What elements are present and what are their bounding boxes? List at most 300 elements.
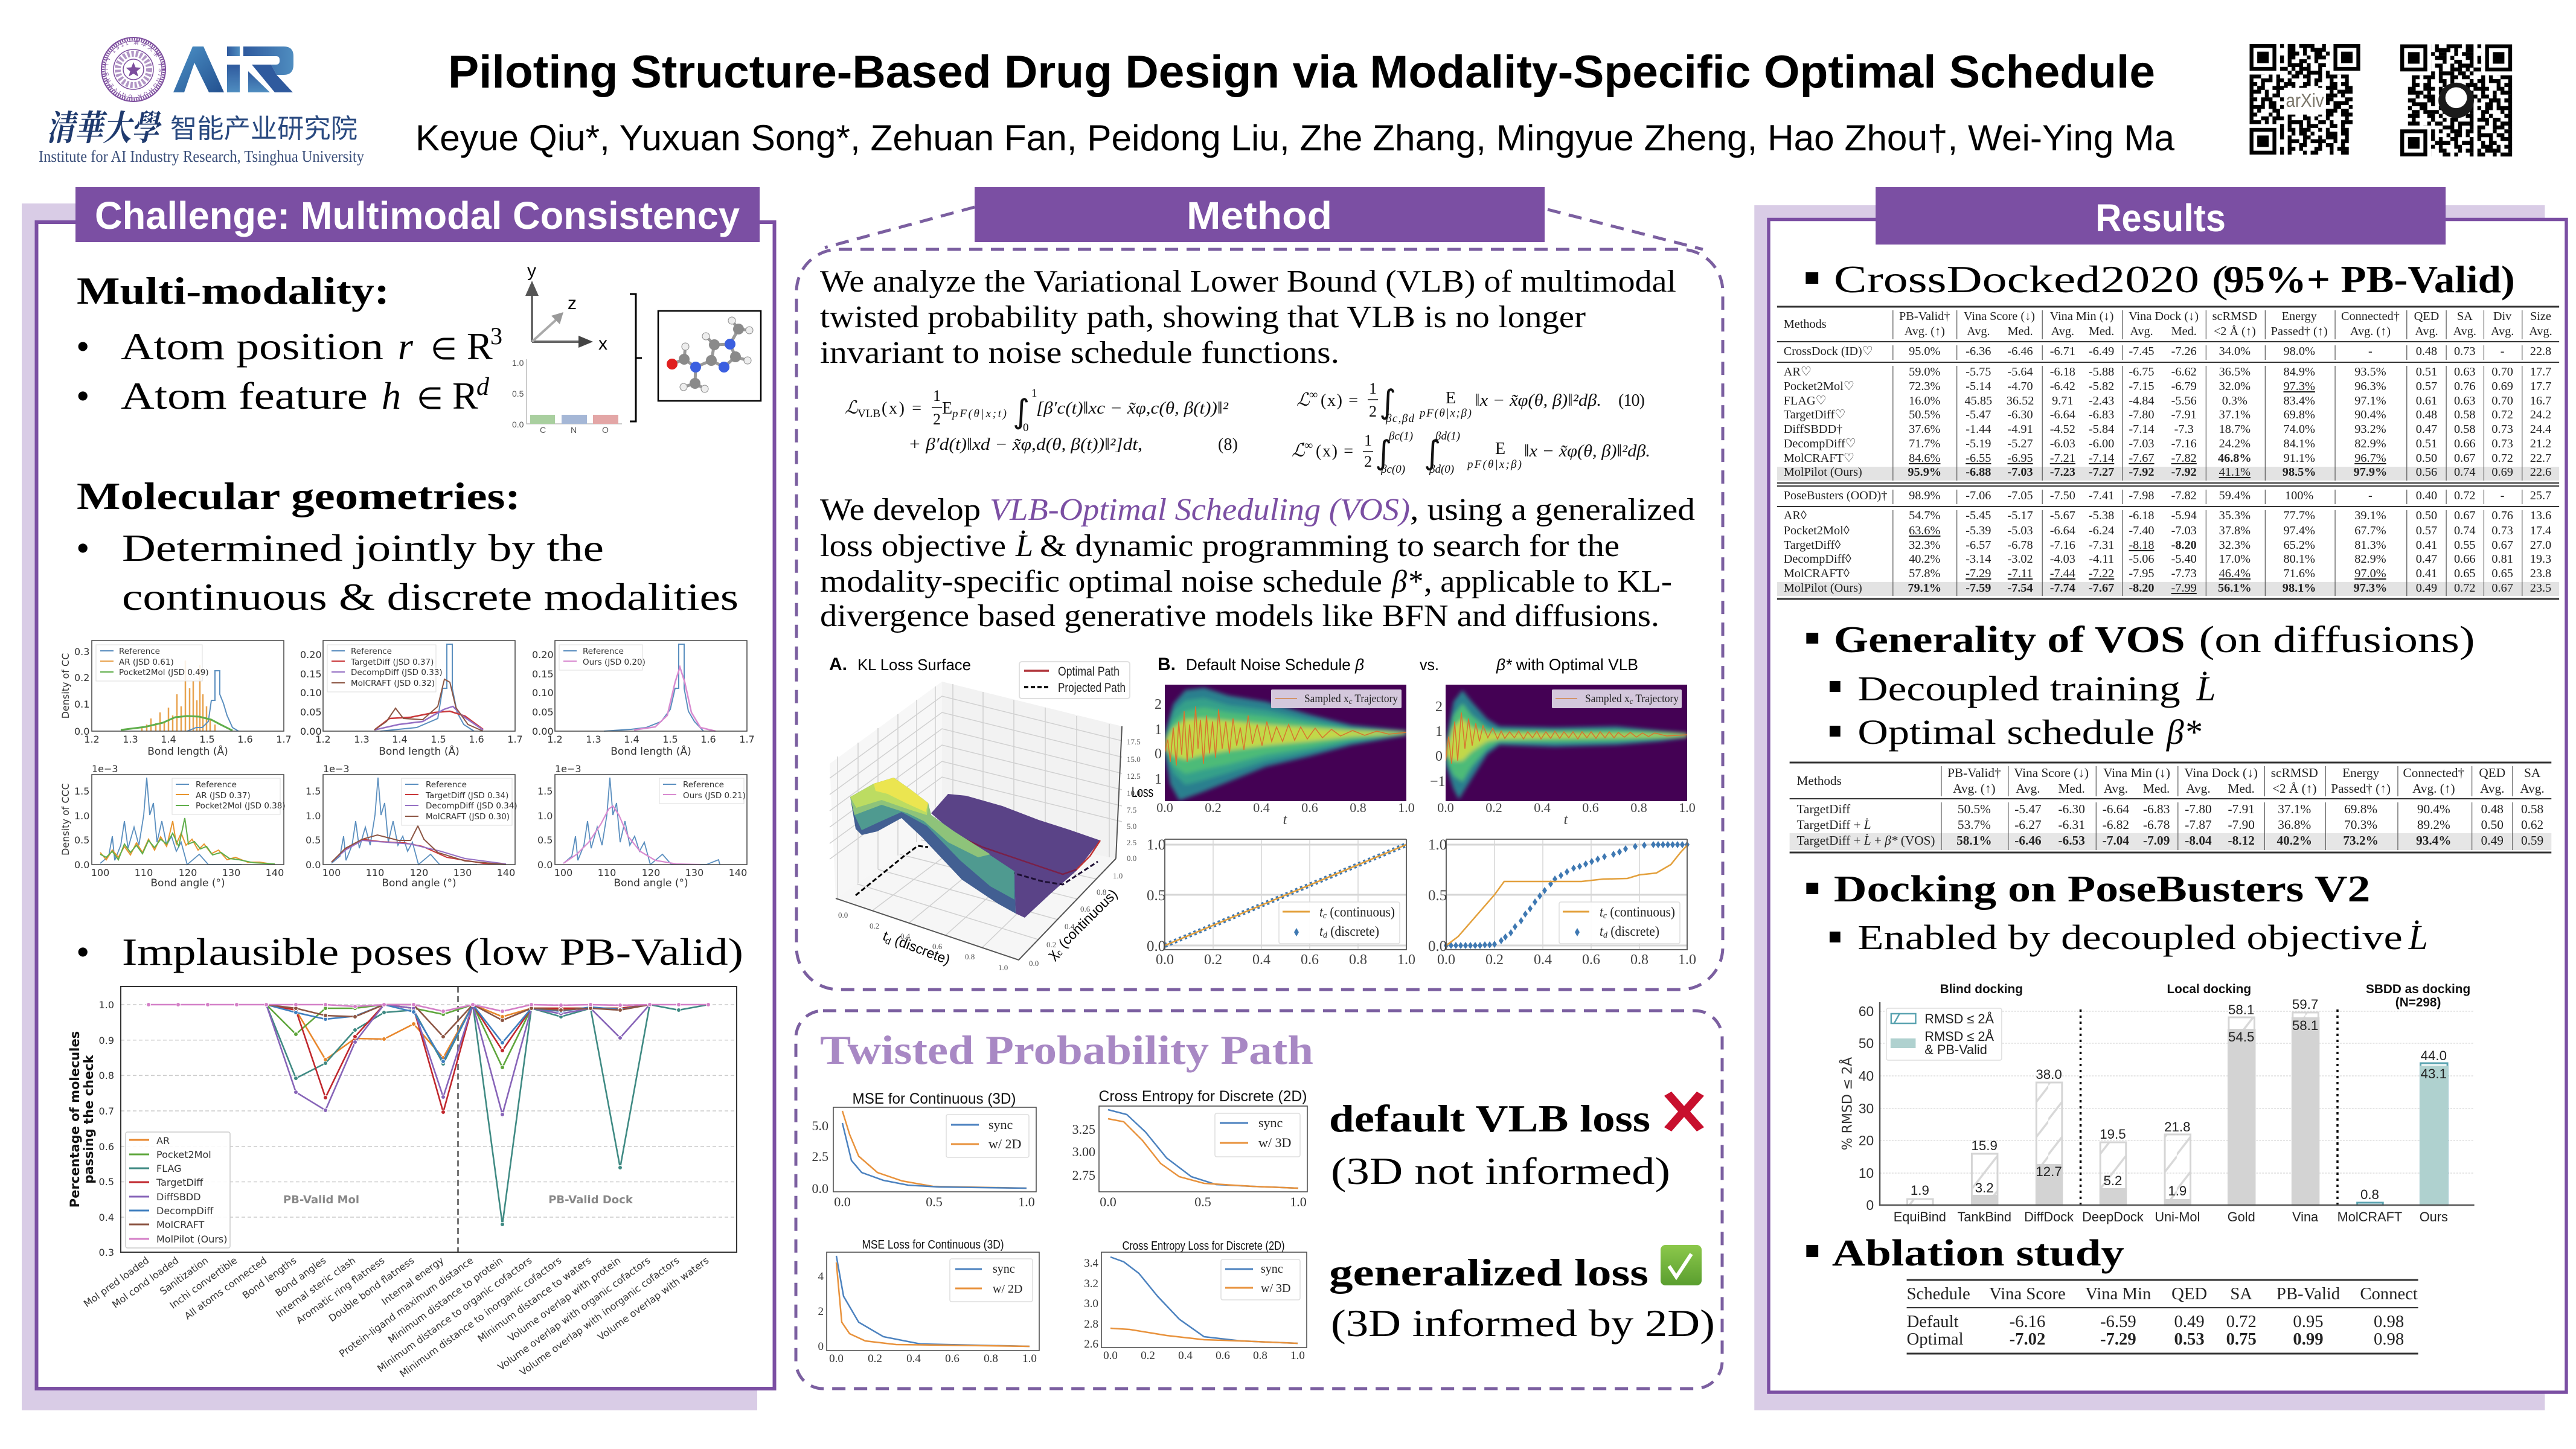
bar chart: docking success: TankBind: [1957, 1209, 2011, 1224]
table: main benchmark: [1777, 307, 2559, 599]
table: generality: TargetDiff + L̇: [1797, 817, 1871, 832]
chart: KL loss surface: c: [1054, 947, 1065, 958]
table: main benchmark: -5.03: [2007, 524, 2033, 537]
line chart: optimal schedule: (discrete): [1607, 924, 1659, 939]
table: main benchmark: 0.72: [2454, 489, 2476, 502]
table: main benchmark: -5.88: [2089, 365, 2114, 379]
table: main benchmark: -7.99: [2171, 581, 2197, 595]
chart: bond angle, Ours: Reference: [683, 780, 724, 790]
table: main benchmark: -7.67: [2129, 452, 2155, 465]
chart: MSE continuous bottom: 0: [818, 1340, 824, 1353]
table: main benchmark: 32.3%: [2219, 539, 2251, 552]
chart: cross entropy discrete bottom: 0.0: [1103, 1349, 1118, 1362]
chart: bond angle, AR and Pocket2Mol: [60, 763, 286, 889]
table: main benchmark: 0.66: [2454, 437, 2476, 450]
table: generality: 40.2%: [2277, 833, 2312, 848]
chart: bond angle, AR and Pocket2Mol: 110: [135, 867, 153, 878]
text block: VOS description: loss objective: [820, 529, 1006, 563]
text block: multi-modality: ∈: [417, 381, 443, 416]
table: main benchmark: 17.7: [2530, 365, 2551, 379]
table: main benchmark: 18.7%: [2219, 423, 2251, 436]
equation 10: ∞: [1309, 388, 1318, 401]
table: main benchmark: -6.03: [2050, 437, 2075, 450]
table: main benchmark: -5.56: [2171, 394, 2197, 408]
table: main benchmark: 0.73: [2454, 345, 2476, 358]
table: generality: -7.04: [2103, 833, 2129, 848]
table: main benchmark: scRMSD: [2212, 310, 2257, 323]
chart: PoseBusters check line chart: 1.0: [99, 999, 114, 1011]
table: main benchmark: 17.0%: [2219, 552, 2251, 566]
chart: bond angle, AR and Pocket2Mol: Pocket2Mol (JSD 0.38): [196, 801, 286, 811]
table: main benchmark: 23.8: [2530, 567, 2551, 580]
chart: bond angle, AR and Pocket2Mol: 130: [222, 867, 240, 878]
chart: bond angle, AR and Pocket2Mol: 0.5: [74, 834, 89, 846]
table: main benchmark: 59.4%: [2219, 489, 2251, 502]
chart: KL loss surface: 0.6: [1080, 904, 1091, 913]
bar chart: docking success: Blind docking: [1940, 982, 2023, 996]
table: ablation: -7.02: [2010, 1329, 2045, 1349]
chart: cross entropy discrete bottom: 3.2: [1084, 1278, 1098, 1290]
heatmap: optimal schedule trajectory: c: [1630, 697, 1633, 706]
chart: MSE continuous top: 0.0: [834, 1194, 851, 1209]
table: main benchmark: -7.74: [2050, 581, 2075, 595]
chart: PoseBusters check line chart: Minimum distance to organic cofactors: [375, 1255, 534, 1374]
table: main benchmark: -: [2501, 345, 2505, 358]
table: main benchmark: TargetDiff♡: [1784, 408, 1845, 421]
bar chart: docking success: EquiBind: [1894, 1209, 1946, 1224]
chart: cross entropy discrete bottom: 1.0: [1290, 1349, 1305, 1362]
equation decoupled objective: [1292, 430, 1650, 476]
heatmap: optimal schedule trajectory: 2: [1435, 699, 1443, 715]
table: main benchmark: 71.6%: [2284, 567, 2315, 580]
table: main benchmark: -7.80: [2129, 408, 2155, 421]
table: generality: 36.8%: [2278, 817, 2311, 832]
equation 8: 2: [933, 411, 941, 428]
table: main benchmark: MolCRAFT◊: [1784, 567, 1850, 580]
table: main benchmark: Size: [2530, 310, 2551, 323]
chart: bond length, TargetDiff DecompDiff MolCRAFT: 1.7: [507, 734, 523, 745]
icon: atom type bars: [512, 358, 622, 435]
equation 10: βc,βd: [1385, 412, 1414, 425]
table: main benchmark: 37.1%: [2219, 408, 2251, 421]
table: main benchmark: -7.59: [1966, 581, 1991, 595]
table: main benchmark: 0.67: [2454, 509, 2476, 522]
table: main benchmark: 17.7: [2530, 380, 2551, 393]
chart: bond length, AR and Pocket2Mol: [60, 641, 292, 758]
text block: generalized loss: generalized loss: [1329, 1251, 1648, 1294]
chart legend: [126, 1132, 230, 1248]
table: generality: 53.7%: [1958, 817, 1991, 832]
chart: KL loss surface: 0.4: [1065, 922, 1075, 931]
equation decoupled objective: E: [1495, 440, 1505, 458]
chart: KL loss surface: 0.2: [1046, 940, 1056, 949]
icon: green check: [1661, 1245, 1702, 1285]
bar chart: docking success: % RMSD ≤ 2Å: [1839, 1057, 1856, 1150]
line chart: default schedule: [1147, 837, 1415, 968]
text block: VOS description: We develop: [820, 493, 981, 527]
chart: KL loss surface: 5.0: [1127, 822, 1136, 831]
section: CrossDocked2020: CrossDocked2020 (: [1834, 258, 2228, 301]
chart: bond length, TargetDiff DecompDiff MolCRAFT: 1.3: [354, 734, 370, 745]
table: main benchmark: 40.2%: [1909, 552, 1940, 566]
chart: KL loss surface: 1.0: [998, 963, 1008, 972]
heatmap: default schedule trajectory: 0: [1155, 746, 1162, 762]
table: main benchmark: 0.69: [2491, 465, 2513, 479]
table: main benchmark: 97.0%: [2354, 567, 2386, 580]
table: generality: Med.: [2059, 781, 2085, 796]
chart: bond length, AR and Pocket2Mol: 0.3: [74, 646, 89, 657]
table: main benchmark: 0.51: [2416, 437, 2437, 450]
table: main benchmark: 95.0%: [1909, 345, 1940, 358]
table: main benchmark: -4.91: [2007, 423, 2033, 436]
line chart: optimal schedule: [1428, 837, 1696, 968]
chart: KL loss surface: [829, 654, 1153, 972]
table: main benchmark: 16.7: [2530, 394, 2551, 408]
chart: bond angle, TargetDiff DecompDiff MolCRAFT: 0.5: [306, 834, 321, 846]
section: generality of VOS: [1806, 619, 2475, 752]
table: main benchmark: 0.63: [2454, 394, 2476, 408]
chart: PoseBusters check line chart: Percentage of molecules: [68, 1031, 82, 1208]
table: main benchmark: 0.65: [2491, 567, 2513, 580]
table: main benchmark: DiffSBDD†: [1784, 423, 1842, 436]
chart legend: RMSD ≤ 2Å: [1924, 1029, 1994, 1044]
icon: atom type bars: 1.0: [512, 358, 524, 368]
equation decoupled objective: (x) =: [1316, 442, 1353, 461]
table: generality: -7.90: [2228, 817, 2255, 832]
table: generality: QED: [2479, 766, 2505, 780]
table: generality: 93.4%: [2416, 833, 2452, 848]
table: main benchmark: 27.0: [2530, 539, 2551, 552]
heatmap: default schedule trajectory: 0.6: [1301, 800, 1318, 815]
table: main benchmark: -7.23: [2050, 465, 2075, 479]
chart: cross entropy discrete bottom: 0.2: [1141, 1349, 1155, 1362]
line chart: default schedule: c: [1323, 911, 1327, 921]
text block: multi-modality: r: [398, 325, 414, 368]
table: ablation: PB-Valid: [2276, 1284, 2341, 1303]
chart: PoseBusters check line chart: Bond angles: [273, 1255, 328, 1299]
chart: PoseBusters check line chart: Mol cond loaded: [110, 1255, 181, 1310]
heatmap: optimal schedule trajectory: 0.8: [1630, 800, 1647, 815]
table: generality: 0.58: [2521, 802, 2543, 816]
table: main benchmark: 0.40: [2416, 489, 2437, 502]
chart: bond length, Ours: 1.3: [586, 734, 601, 745]
chart: KL loss surface: 10.0: [1127, 788, 1141, 798]
QR code: GitHub: [2397, 40, 2516, 160]
table: main benchmark: Avg.: [2529, 325, 2552, 338]
chart: MSE continuous bottom: 0.2: [868, 1352, 882, 1365]
chart: cross entropy discrete bottom: 2.6: [1084, 1338, 1098, 1351]
chart: bond length, Ours: 1.2: [547, 734, 563, 745]
chart legend: Pocket2Mol: [156, 1149, 211, 1160]
bar chart: docking success: Vina: [2292, 1209, 2319, 1224]
table: main benchmark: -7.45: [2129, 345, 2155, 358]
chart: PoseBusters check line chart: Volume overlap with inorganic cofactors: [517, 1255, 681, 1378]
table: main benchmark: -: [2368, 345, 2373, 358]
table: main benchmark: 0.74: [2454, 465, 2476, 479]
chart: bond length, Ours: 0.15: [532, 668, 554, 680]
icon: 3D axes: [525, 261, 607, 354]
chart: bond angle, AR and Pocket2Mol: Bond angle (°): [150, 877, 225, 889]
chart: KL loss surface: χ: [1044, 946, 1060, 962]
table: main benchmark: -6.78: [2007, 539, 2033, 552]
line chart: default schedule: 1.0: [1397, 952, 1415, 968]
chart: bond length, TargetDiff DecompDiff MolCRAFT: 1.5: [431, 734, 446, 745]
table: main benchmark: 0.73: [2491, 423, 2513, 436]
table: main benchmark: 59.0%: [1909, 365, 1940, 379]
table: main benchmark: -7.03: [2171, 524, 2197, 537]
chart: MSE continuous top: 0.0: [812, 1181, 828, 1196]
table: generality: Avg.: [2186, 781, 2211, 796]
table: ablation: 0.53: [2174, 1329, 2205, 1349]
table: main benchmark: -7.73: [2171, 567, 2197, 580]
table: main benchmark: 0.55: [2454, 539, 2476, 552]
icon: atom type bars: N: [571, 425, 577, 435]
table: main benchmark: 0.69: [2491, 380, 2513, 393]
equation 10: 1: [1369, 380, 1377, 397]
chart: MSE continuous bottom: 1.0: [1022, 1352, 1037, 1365]
line chart: optimal schedule: t: [1600, 904, 1603, 920]
table: main benchmark: <2 Å (↑): [2214, 325, 2256, 338]
heatmap: optimal schedule trajectory: 1.0: [1679, 800, 1696, 815]
bar chart: docking success: 12.7: [2036, 1164, 2062, 1179]
equation 10: [1296, 380, 1645, 425]
table: main benchmark: -6.00: [2089, 437, 2114, 450]
table: main benchmark: AR◊: [1784, 509, 1807, 522]
table: ablation: 0.95: [2293, 1312, 2324, 1331]
authors: Keyue Qiu*, Yuxuan Song*, Zehuan Fan, Peidong Liu, Zhe Zhang, Mingyue Zheng, Hao Zhou†, Wei-Ying Ma: [415, 118, 2175, 158]
chart: bond angle, AR and Pocket2Mol: 120: [179, 867, 197, 878]
chart: bond angle, TargetDiff DecompDiff MolCRAFT: 110: [366, 867, 384, 878]
table: main benchmark: -5.82: [2089, 380, 2114, 393]
table: main benchmark: 0.41: [2416, 567, 2437, 580]
chart: bond angle, TargetDiff DecompDiff MolCRAFT: 100: [322, 867, 341, 878]
table: generality: -5.47: [2014, 802, 2042, 816]
table: main benchmark: -5.39: [1966, 524, 1991, 537]
icon: molecule: [658, 311, 761, 401]
icon: atom type bars: C: [540, 425, 546, 435]
table: main benchmark: -6.42: [2050, 380, 2075, 393]
table: main benchmark: 98.1%: [2283, 581, 2316, 595]
chart: cross entropy discrete bottom: 0.6: [1216, 1349, 1230, 1362]
bar chart: docking success: 40: [1859, 1068, 1874, 1084]
chart: KL loss surface: (continuous): [1053, 886, 1120, 954]
table: main benchmark: -5.64: [2007, 365, 2033, 379]
chart: bond length, AR and Pocket2Mol: 0.2: [74, 672, 89, 683]
table: generality: Avg. (↑): [2412, 781, 2455, 796]
table: main benchmark: -7.15: [2129, 380, 2155, 393]
table: main benchmark: -7.91: [2171, 408, 2197, 421]
table: main benchmark: -5.94: [2171, 509, 2197, 522]
table: main benchmark: DecompDiff◊: [1784, 552, 1852, 566]
table: generality: SA: [2524, 766, 2541, 780]
table: main benchmark: -7.92: [2129, 465, 2155, 479]
heading: method: [975, 187, 1545, 242]
bar chart: docking success: 60: [1859, 1003, 1874, 1019]
table: generality: Avg.: [2016, 781, 2040, 796]
chart: MSE continuous bottom: 4: [818, 1270, 824, 1283]
table: main benchmark: PoseBusters (OOD)†: [1784, 489, 1887, 502]
table: main benchmark: 56.1%: [2218, 581, 2252, 595]
chart: PoseBusters check line chart: All atoms connected: [182, 1255, 269, 1322]
text block: default VLB loss: (3D not informed): [1331, 1150, 1670, 1192]
chart: PoseBusters check line chart: Minimum distance to protein: [386, 1255, 505, 1346]
text block: multi-modality: [76, 269, 502, 417]
table: main benchmark: AR♡: [1784, 365, 1812, 379]
chart: MSE continuous bottom: 0.8: [984, 1352, 998, 1365]
chart: cross entropy discrete bottom: 3.4: [1084, 1257, 1099, 1270]
table: ablation: 0.75: [2226, 1329, 2257, 1349]
table: main benchmark: -5.45: [1966, 509, 1991, 522]
icon: 3D axes: z: [568, 293, 577, 313]
table: main benchmark: -5.38: [2089, 509, 2114, 522]
table: generality: -6.27: [2014, 817, 2042, 832]
chart: bond length, Ours: 1.4: [624, 734, 639, 745]
chart: KL loss surface: 0.8: [965, 952, 975, 961]
equation 8: E: [942, 399, 952, 418]
line chart: optimal schedule: t: [1600, 924, 1604, 939]
bar chart: docking success: Uni-Mol: [2155, 1209, 2200, 1224]
table: main benchmark: 80.1%: [2284, 552, 2315, 566]
chart: bond angle, Ours: 140: [729, 867, 747, 878]
table: generality: 58.1%: [1956, 833, 1992, 848]
chart: bond angle, Ours: 0.5: [537, 834, 553, 846]
table: main benchmark: PB-Valid†: [1899, 310, 1950, 323]
table: main benchmark: -6.71: [2050, 345, 2075, 358]
table: main benchmark: MolPilot (Ours): [1784, 465, 1862, 479]
chart: bond angle, TargetDiff DecompDiff MolCRAFT: TargetDiff (JSD 0.34): [425, 791, 508, 801]
equation decoupled objective: βc(0): [1380, 463, 1405, 476]
table: generality: -6.46: [2014, 833, 2042, 848]
table: main benchmark: Med.: [2089, 325, 2114, 338]
line chart: default schedule: 0.0: [1156, 952, 1174, 968]
chart legend: TargetDiff: [156, 1177, 203, 1188]
table: main benchmark: 0.47: [2416, 423, 2437, 436]
table: main benchmark: Vina Dock (↓): [2129, 310, 2199, 323]
icon: atom type bars: 0.5: [512, 389, 524, 398]
chart: bond length, TargetDiff DecompDiff MolCRAFT: [300, 641, 523, 758]
text block: multi-modality: R: [467, 325, 493, 368]
table: main benchmark: 46.8%: [2218, 452, 2252, 465]
heatmap: default schedule trajectory: 1.0: [1398, 800, 1415, 815]
table: generality: -6.53: [2059, 833, 2085, 848]
chart: KL loss surface: 0.6: [932, 942, 943, 951]
table: main benchmark: 25.7: [2530, 489, 2551, 502]
section: docking on PoseBusters: L̇: [2408, 919, 2428, 957]
bar chart: docking success: 5.2: [2103, 1173, 2122, 1188]
table: generality: <2 Å (↑): [2272, 781, 2316, 796]
chart: bond angle, AR and Pocket2Mol: Reference: [196, 780, 237, 790]
chart: bond length, TargetDiff DecompDiff MolCRAFT: Reference: [351, 647, 392, 656]
text block: VLB analysis: invariant to noise schedule functions.: [820, 336, 1339, 370]
chart headings: noise schedule: Default Noise Schedule β: [1186, 656, 1364, 674]
heatmap: default schedule trajectory: c: [1349, 697, 1353, 706]
chart: PoseBusters check line chart: PB-Valid Dock: [548, 1194, 633, 1206]
table: main benchmark: Avg.: [2453, 325, 2476, 338]
heading: results: Results: [2095, 197, 2226, 240]
chart: bond length, TargetDiff DecompDiff MolCRAFT: MolCRAFT (JSD 0.32): [351, 679, 435, 688]
table: main benchmark: 0.72: [2491, 452, 2513, 465]
text block: default VLB loss: default VLB loss: [1329, 1097, 1650, 1140]
chart: PoseBusters check line chart: [68, 987, 737, 1380]
table: main benchmark: -5.06: [2129, 552, 2155, 566]
table: main benchmark: 69.8%: [2284, 408, 2315, 421]
chart: bond angle, Ours: 100: [554, 867, 572, 878]
chart: bond length, Ours: Bond length (Å): [610, 744, 691, 758]
chart: MSE continuous top: 1.0: [1018, 1194, 1035, 1209]
table: generality: Vina Score (↓): [2014, 766, 2089, 780]
table: main benchmark: -7.98: [2129, 489, 2155, 502]
equation 10: E: [1446, 389, 1456, 408]
table: main benchmark: 0.72: [2491, 408, 2513, 421]
table: ablation: Connect: [2360, 1284, 2418, 1303]
table: main benchmark: 0.73: [2491, 437, 2513, 450]
table: main benchmark: 0.67: [2454, 452, 2476, 465]
table: main benchmark: 90.4%: [2354, 408, 2386, 421]
table: main benchmark: -7.21: [2050, 452, 2075, 465]
table: main benchmark: 0.58: [2454, 408, 2476, 421]
chart legend: MolPilot (Ours): [156, 1233, 228, 1245]
chart: bond length, TargetDiff DecompDiff MolCRAFT: Bond length (Å): [379, 744, 460, 758]
text block: molecular geometries: Molecular geometries:: [77, 475, 521, 517]
table: main benchmark: SA: [2457, 310, 2473, 323]
equation decoupled objective: ℒ̇: [1292, 441, 1306, 461]
chart: bond angle, TargetDiff DecompDiff MolCRAFT: 1.0: [306, 810, 321, 822]
table: generality: 69.8%: [2344, 802, 2377, 816]
chart: bond angle, AR and Pocket2Mol: AR (JSD 0.37): [196, 791, 251, 801]
heatmap: optimal schedule trajectory: [1430, 685, 1696, 828]
logo: Tsinghua calligraphy name: 清華大學: [46, 109, 162, 148]
table: generality: -6.30: [2059, 802, 2085, 816]
chart: bond length, AR and Pocket2Mol: 0.1: [74, 699, 89, 710]
table: main benchmark: 0.51: [2416, 365, 2437, 379]
section: generality of VOS: Generality of VOS: [1834, 619, 2185, 661]
table: ablation: Schedule: [1907, 1284, 1970, 1303]
table: generality: 89.2%: [2417, 817, 2450, 832]
chart: bond angle, Ours: Bond angle (°): [614, 877, 688, 889]
text block: generalized loss: (3D informed by 2D): [1331, 1302, 1715, 1345]
chart: bond angle, AR and Pocket2Mol: 1.0: [74, 810, 89, 822]
table: main benchmark: Med.: [2007, 325, 2033, 338]
bar chart: docking success: DeepDock: [2082, 1209, 2144, 1224]
table: ablation: -7.29: [2100, 1329, 2136, 1349]
panel: twisted probability path: [796, 1011, 1722, 1389]
chart: KL loss surface: Loss: [1132, 784, 1153, 801]
equation 10: (10): [1618, 391, 1645, 410]
chart: bond length, AR and Pocket2Mol: 1.4: [161, 734, 176, 745]
table: main benchmark: QED: [2414, 310, 2439, 323]
chart: bond length, Ours: Ours (JSD 0.20): [583, 657, 646, 667]
chart: cross entropy discrete top: Cross Entropy for Discrete (2D): [1099, 1088, 1307, 1105]
table: ablation: Vina Min: [2085, 1284, 2151, 1303]
chart: PoseBusters check line chart: Volume overlap with waters: [595, 1255, 711, 1343]
chart: bond angle, Ours: 120: [642, 867, 660, 878]
chart: bond angle, TargetDiff DecompDiff MolCRAFT: 140: [497, 867, 515, 878]
chart: bond length, TargetDiff DecompDiff MolCRAFT: 1.2: [315, 734, 331, 745]
chart: bond angle, AR and Pocket2Mol: 140: [266, 867, 284, 878]
chart: MSE continuous bottom: 2: [818, 1305, 824, 1318]
table: ablation: Default: [1907, 1312, 1959, 1331]
chart: bond angle, TargetDiff DecompDiff MolCRAFT: [306, 763, 517, 889]
table: main benchmark: -5.17: [2007, 509, 2033, 522]
table: main benchmark: 36.52: [2007, 394, 2034, 408]
chart: bond angle, AR and Pocket2Mol: 1e−3: [92, 763, 118, 775]
equation 8: + β′d(t)‖xd − x̃φ,d(θ, β(t))‖²]dt,: [908, 435, 1142, 454]
heatmap: default schedule trajectory: 0.0: [1156, 800, 1173, 815]
heatmap: optimal schedule trajectory: −1: [1430, 774, 1446, 790]
chart: bond length, TargetDiff DecompDiff MolCRAFT: 0.20: [300, 649, 322, 661]
table: main benchmark: 32.3%: [1909, 539, 1940, 552]
equation 10: ‖x − x̃φ(θ, β)‖²dβ.: [1475, 391, 1601, 410]
